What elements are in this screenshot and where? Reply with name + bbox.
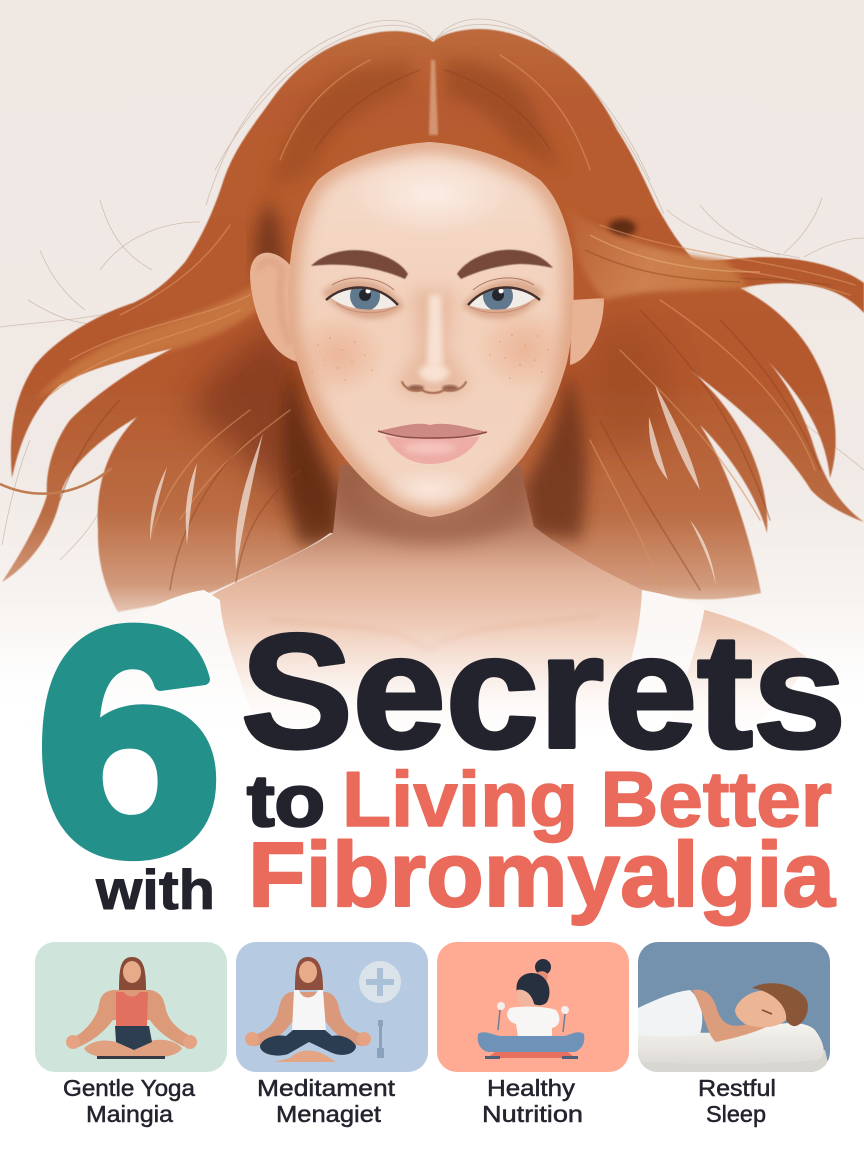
nose	[396, 290, 470, 395]
panel: restful sleep	[638, 942, 830, 1072]
flowing hair	[0, 29, 864, 612]
caption: Gentle Yoga Maingia: Maingia	[86, 1101, 173, 1127]
caption: Gentle Yoga Maingia: Gentle Yoga	[63, 1075, 195, 1101]
face	[288, 142, 574, 517]
caption: Healthy Nutrition: Healthy	[487, 1075, 576, 1101]
caption: Healthy Nutrition	[482, 1075, 583, 1127]
panel: healthy nutrition	[437, 942, 629, 1072]
heading word: Fibromyalgia: Fibromyalgia	[248, 824, 836, 926]
lips	[378, 424, 487, 464]
heading word: Secrets: Secrets	[241, 601, 846, 782]
caption: Meditament Menagiet: Menagiet	[276, 1101, 382, 1127]
hair strands	[50, 55, 855, 590]
big number 6: 6	[36, 562, 222, 920]
face shading	[288, 142, 574, 517]
neck and shoulders	[100, 465, 810, 740]
icon: pillow	[638, 1023, 824, 1064]
right eyebrow	[457, 250, 553, 279]
soft shadows within the hair	[35, 60, 670, 545]
heading word: to: to	[247, 762, 325, 842]
icon: sleeping woman	[638, 983, 808, 1042]
panel: meditation	[236, 942, 428, 1072]
right eye	[462, 278, 544, 319]
icon: mattress	[638, 1050, 830, 1072]
caption: Restful Sleep	[698, 1075, 776, 1127]
center parting	[429, 60, 438, 135]
caption: Meditament Menagiet	[257, 1075, 396, 1127]
white tank top	[20, 590, 705, 740]
caption: Healthy Nutrition: Nutrition	[482, 1101, 583, 1127]
portrait of red-haired woman	[0, 19, 864, 740]
icon: small device	[377, 1020, 384, 1058]
icon: woman with bowl	[478, 959, 584, 1059]
flyaway hairs	[0, 19, 864, 560]
right lock sweeping over ear	[566, 205, 760, 300]
heading phrase: Living Better: Living Better	[342, 755, 832, 843]
icon: woman in yoga pose, red top	[66, 957, 197, 1059]
ears	[250, 253, 604, 365]
icon: woman meditating, white top	[245, 957, 371, 1062]
hair tail wisp	[0, 468, 112, 494]
caption: Restful Sleep: Sleep	[706, 1101, 766, 1127]
freckles	[311, 334, 549, 381]
title	[36, 562, 846, 926]
heading word: with: with	[95, 858, 215, 921]
pale slits between hair locks	[150, 385, 716, 585]
caption: Restful Sleep: Restful	[698, 1075, 776, 1101]
icon: plus badge	[359, 961, 401, 1003]
caption: Gentle Yoga Maingia	[63, 1075, 195, 1127]
caption: Meditament Menagiet: Meditament	[257, 1075, 396, 1101]
white fade over chest	[0, 625, 864, 740]
left eyebrow	[311, 250, 408, 279]
panel: gentle yoga	[35, 942, 227, 1072]
left eye	[322, 278, 404, 319]
